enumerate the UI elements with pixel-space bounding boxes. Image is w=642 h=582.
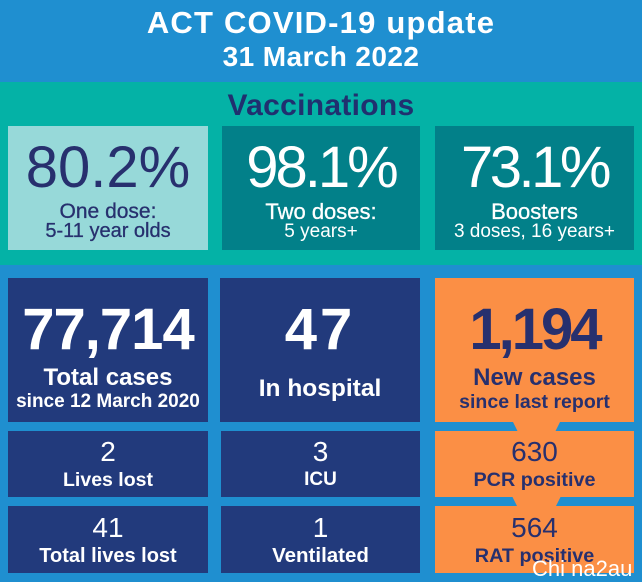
stat: lives lost: 2 bbox=[100, 436, 116, 467]
stat: pcr positive bbox=[435, 431, 634, 497]
title: ACT COVID-19 update bbox=[147, 5, 495, 40]
stat: lives lost: Lives lost bbox=[63, 469, 153, 491]
stat: one dose: 5-11 year olds bbox=[45, 220, 171, 242]
stat: lives lost bbox=[8, 431, 208, 497]
stat: pcr positive: 630 bbox=[511, 436, 558, 467]
watermark: Chi na2au bbox=[532, 556, 632, 581]
stat: two doses: 98.1% bbox=[246, 135, 396, 200]
stat: rat positive bbox=[435, 506, 634, 573]
stat: total cases: Total cases bbox=[44, 364, 172, 391]
stat: total lives lost bbox=[8, 506, 208, 573]
stat: total cases bbox=[8, 278, 208, 422]
stat: total cases: since 12 March 2020 bbox=[16, 391, 200, 412]
stat: new cases: since last report bbox=[459, 391, 610, 413]
stat: icu: ICU bbox=[304, 469, 337, 490]
stat: new cases: 1,194 bbox=[469, 297, 600, 362]
stat: rat positive: 564 bbox=[511, 512, 558, 543]
stat: total lives lost: Total lives lost bbox=[39, 545, 177, 567]
panel: vaccinations bbox=[0, 82, 642, 265]
stat: in hospital: In hospital bbox=[259, 375, 381, 402]
stat: rat positive: RAT positive bbox=[475, 545, 594, 567]
stat: one dose: 80.2% bbox=[26, 135, 190, 200]
stat: boosters: 73.1% bbox=[461, 135, 608, 200]
stat: two doses: Two doses: bbox=[265, 199, 377, 224]
stat: ventilated: Ventilated bbox=[272, 544, 369, 567]
stat: boosters bbox=[435, 126, 634, 250]
stat: two doses bbox=[222, 126, 420, 250]
header band bbox=[0, 0, 642, 82]
stat: ventilated bbox=[221, 506, 420, 573]
stat: boosters: Boosters bbox=[491, 199, 578, 224]
stat: two doses: 5 years+ bbox=[284, 221, 358, 242]
date: 31 March 2022 bbox=[223, 41, 419, 72]
stat: total lives lost: 41 bbox=[92, 512, 124, 543]
connector arrows bbox=[512, 422, 560, 506]
stat: new cases bbox=[435, 278, 634, 422]
stat: ventilated: 1 bbox=[313, 512, 328, 543]
stat: one dose bbox=[8, 126, 208, 250]
heading: vaccinations: Vaccinations bbox=[227, 89, 414, 122]
stat: pcr positive: PCR positive bbox=[473, 469, 596, 491]
stat: boosters: 3 doses, 16 years+ bbox=[454, 221, 615, 242]
stat: total cases: 77,714 bbox=[22, 297, 194, 362]
stat: in hospital: 47 bbox=[285, 297, 355, 362]
stat: in hospital bbox=[220, 278, 420, 422]
stat: icu: 3 bbox=[313, 436, 328, 467]
stat: new cases: New cases bbox=[473, 364, 596, 391]
stat: one dose: One dose: bbox=[60, 200, 156, 223]
stat: icu bbox=[221, 431, 420, 497]
